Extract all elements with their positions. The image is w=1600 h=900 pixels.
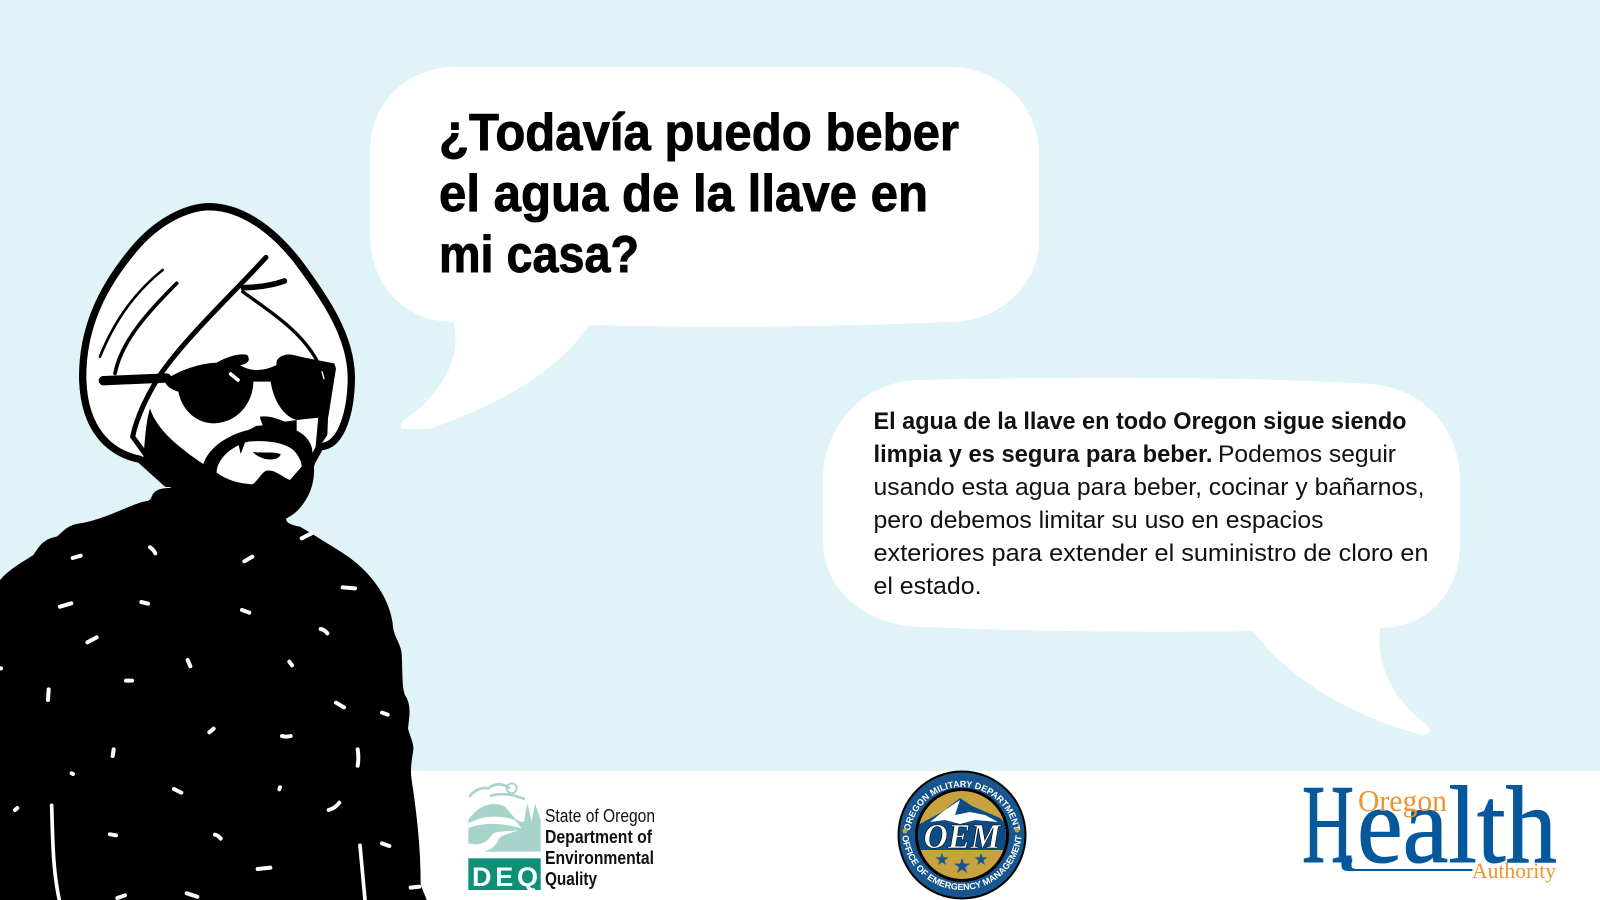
turban outline <box>83 207 351 483</box>
text block: answer: pero debemos limitar su uso en espacios <box>874 507 1324 534</box>
footer band <box>0 771 1600 900</box>
logo: Oregon DEQ <box>468 783 655 892</box>
head: turban, glasses and beard <box>83 207 351 537</box>
panel: question speech bubble <box>370 67 1039 429</box>
DEQ wordmark: State of Oregon <box>545 806 655 826</box>
DEQ wordmark: Department of <box>545 827 653 847</box>
DEQ wordmark: Quality <box>545 869 597 889</box>
sunglasses <box>165 354 336 423</box>
body: black sweater <box>0 473 427 900</box>
sweater flecks <box>0 533 419 900</box>
text block: answer: el estado. <box>874 573 982 600</box>
mouth area <box>217 441 302 484</box>
logo: Oregon Military Department OEM seal <box>898 770 1026 900</box>
Authority wordmark: Authority <box>1472 858 1556 883</box>
text block: answer: usando esta agua para beber, cocinar y bañarnos, <box>874 474 1424 501</box>
seal stars: ★ <box>953 854 971 878</box>
Oregon wordmark: Oregon <box>1358 783 1447 818</box>
seal title: OEM <box>924 817 1002 856</box>
heading: question: mi casa? <box>439 226 639 284</box>
heading: question <box>439 104 959 284</box>
nose highlight <box>255 418 263 426</box>
seal ring text <box>902 780 1022 890</box>
text block: answer: limpia y es segura para beber. <box>874 441 1212 468</box>
DEQ wordmark <box>545 806 655 889</box>
logo: Oregon Health Authority <box>1302 763 1557 887</box>
heading: question: ¿Todavía puedo beber <box>439 104 959 162</box>
seal stars <box>934 850 989 878</box>
DEQ landscape <box>468 783 541 890</box>
seal stars: ★ <box>934 850 950 870</box>
seal stars: ★ <box>973 850 989 870</box>
text block: answer: exteriores para extender el suministro de cloro en <box>874 540 1428 567</box>
turban folds <box>100 257 317 456</box>
seal ring text: OFFICE OF EMERGENCY MANAGEMENT <box>902 835 1022 890</box>
DEQ wordmark: Environmental <box>545 848 654 868</box>
seal ring text: OREGON MILITARY DEPARTMENT <box>904 780 1020 830</box>
DEQ letters: DEQ <box>472 862 538 892</box>
Health wordmark: H <box>1302 763 1354 887</box>
illustration: man with turban and sunglasses <box>0 207 427 900</box>
heading: question: el agua de la llave en <box>439 165 928 223</box>
panel: answer speech bubble <box>823 378 1460 735</box>
text block: answer <box>874 408 1428 600</box>
Health wordmark: ealth <box>1357 764 1557 886</box>
text block: answer: El agua de la llave en todo Oregon sigue siendo <box>874 408 1406 435</box>
beard <box>142 408 320 537</box>
side hair <box>315 410 328 453</box>
seal artwork <box>918 791 1006 879</box>
text block: answer: Podemos seguir <box>1218 441 1396 468</box>
